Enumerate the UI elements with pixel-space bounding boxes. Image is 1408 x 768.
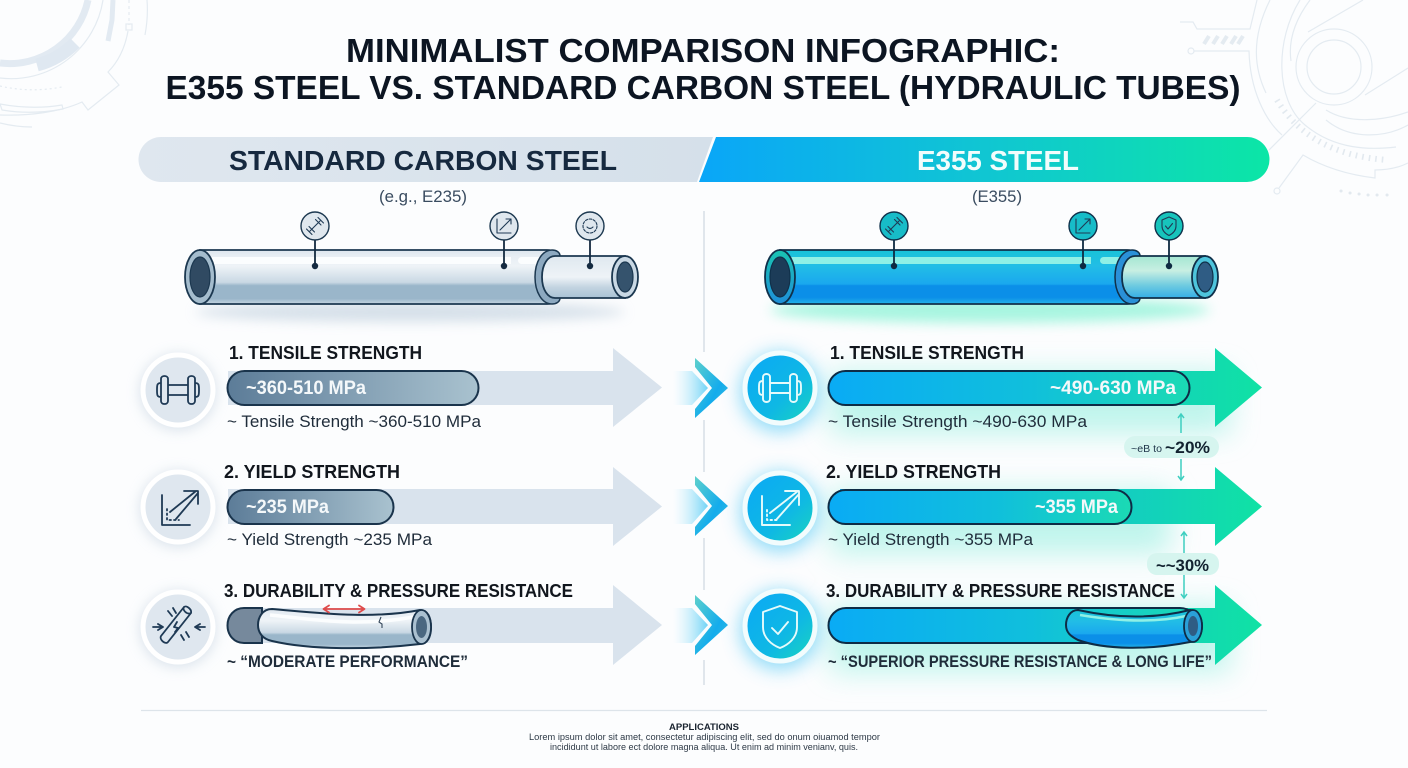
description: ~ Yield Strength ~355 MPa [828,531,1034,549]
value bar: ~360-510 MPa [246,378,366,399]
callout: 20 percent: ~eB to [1131,444,1162,455]
decoration: top left circuit rings [0,0,147,127]
small tube [542,256,638,298]
value bar [228,490,394,524]
chevron 3 [673,595,728,655]
panel: standard carbon steel tube [185,212,638,322]
heading: 1. TENSILE STRENGTH [830,342,1024,363]
arrow [228,467,662,546]
row 2 right: yield strength [740,461,1262,552]
subtitle: e.g. E235: (e.g., E235) [379,187,467,206]
chevron 2 [673,476,728,536]
description: ~ Tensile Strength ~360-510 MPa [227,413,482,431]
crack [379,617,382,628]
subtitle: E355: (E355) [972,187,1022,206]
applications footer: incididunt ut labore ect dolore magna aliqua. Ut enim ad minim venianv, quis. [550,742,858,752]
icon: chart arrow [139,470,217,548]
small tube [1122,256,1218,298]
icon: dumbbell [139,353,217,431]
title [166,32,1240,106]
value bar [828,490,1132,524]
pin: durability [576,212,604,269]
value bar: ~490-630 MPa [1050,378,1176,399]
chevron 1 [673,358,728,418]
header: standard carbon steel: STANDARD CARBON STEEL [229,145,617,176]
row 3 left: durability [139,580,662,671]
heading: 2. YIELD STRENGTH [826,461,1001,482]
pin: shield [1155,212,1183,269]
callout: 30 percent: ~~30% [1156,556,1209,575]
header: E355 steel [699,137,1270,182]
heading: 3. DURABILITY & PRESSURE RESISTANCE [224,580,573,601]
applications footer: Lorem ipsum dolor sit amet, consectetur adipiscing elit, sed do onum oiuamod tempor [529,732,880,742]
header: E355 steel: E355 STEEL [917,145,1079,176]
row 2 left: yield strength [139,461,662,549]
description: ~ Yield Strength ~235 MPa [227,531,433,549]
callout: 30 percent [1147,532,1219,598]
large tube body [765,250,1140,304]
decoration: top right circuit rings [1180,0,1408,195]
title: E355 STEEL VS. STANDARD CARBON STEEL (HYDRAULIC TUBES) [166,69,1240,106]
callout: 20 percent: ~20% [1165,438,1210,457]
description: ~ Tensile Strength ~490-630 MPa [828,413,1088,431]
icon: compressed tube [139,590,217,668]
value bar: ~235 MPa [246,497,329,518]
description: ~ “SUPERIOR PRESSURE RESISTANCE & LONG LIFE” [828,653,1212,671]
row 3 right: durability [740,580,1262,671]
value bar: ~355 MPa [1035,497,1118,518]
icon: dumbbell [740,352,820,432]
header: standard carbon steel [138,137,713,182]
bent tube bar [228,606,431,648]
callout: 20 percent [1124,414,1219,480]
pin: yield [490,212,518,269]
arrow [840,348,1262,427]
right panel glow [830,372,1230,672]
row 1 left: tensile strength [139,342,662,431]
applications footer [529,722,880,752]
large tube body [185,250,560,304]
title: MINIMALIST COMPARISON INFOGRAPHIC: [346,32,1060,69]
value bar with tube [828,608,1202,648]
icon: chart arrow [740,472,820,552]
pin: tensile [301,212,329,269]
pin: yield [1069,212,1097,269]
row 1 right: tensile strength [740,342,1262,432]
icon: shield [740,590,820,670]
value bar [828,371,1190,405]
value bar [228,371,478,405]
arrow [228,348,662,427]
red stress arrow [324,606,364,612]
heading: 1. TENSILE STRENGTH [229,342,422,363]
pin: tensile [880,212,908,269]
description: ~ “MODERATE PERFORMANCE” [227,653,468,671]
panel: E355 steel tube [765,212,1218,323]
heading: 3. DURABILITY & PRESSURE RESISTANCE [826,580,1175,601]
heading: 2. YIELD STRENGTH [224,461,400,482]
arrow [240,585,662,665]
applications footer: APPLICATIONS [669,722,739,733]
arrow [840,467,1262,546]
arrow [840,585,1262,665]
